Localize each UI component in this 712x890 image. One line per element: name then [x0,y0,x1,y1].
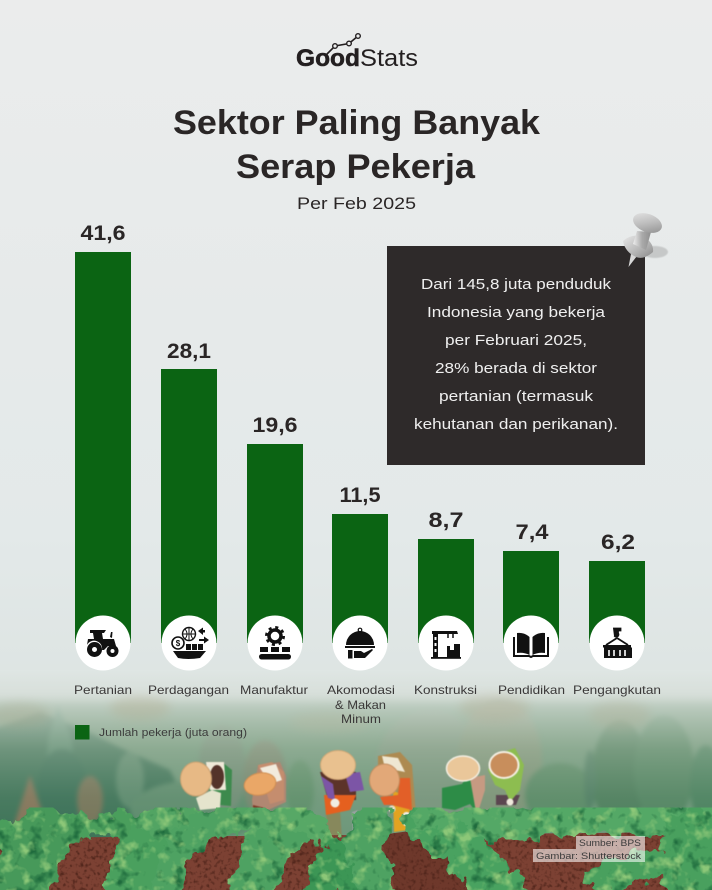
bar: Pendidikan: 7,4 [516,521,549,544]
callout: pertanian (termasuk [439,388,594,405]
logo: Stats [360,45,418,72]
title: Serap Pekerja [236,148,476,186]
logo [296,34,418,72]
farmer 2 [242,762,286,820]
bar: Pendidikan [503,521,559,643]
icon: trade ship [162,616,216,670]
source credits [533,836,645,862]
icon: shipping container [590,616,644,670]
subtitle: Per Feb 2025 [297,194,416,213]
category labels: Manufaktur [240,683,308,697]
logo: Good [296,45,360,72]
legend [75,725,247,740]
category labels: Pendidikan [498,683,565,697]
callout: Dari 145,8 juta penduduk [421,276,612,293]
bar: Konstruksi [418,509,474,643]
category labels: Perdagangan [148,683,229,697]
farmer 5 [442,756,485,812]
title [173,104,540,186]
source credits: Sumber: BPS [579,838,641,849]
category labels [74,683,661,726]
bar: Akomodasi [332,484,388,643]
bar: Pertanian [75,222,131,643]
bar: Akomodasi: 11,5 [340,484,381,507]
category labels: Pengangkutan [573,683,661,697]
bar: Pertanian: 41,6 [80,222,126,245]
bar: Perdagangan [161,340,217,643]
callout: per Februari 2025, [445,332,587,349]
callout: kehutanan dan perikanan). [414,416,618,433]
farmer 3 [320,750,364,840]
farmer 1 [180,762,232,810]
icon: food cloche [332,616,388,670]
icon: manufacturing [248,616,302,670]
category labels: Minum [341,712,381,726]
bar: Perdagangan: 28,1 [167,340,211,363]
callout: 28% berada di sektor [435,360,597,377]
category labels: Konstruksi [414,683,477,697]
farmer 6 [488,748,524,806]
icon: open book [504,616,558,670]
bar: Pengangkutan: 6,2 [601,531,635,554]
bar: Konstruksi: 8,7 [428,509,464,532]
bar: Manufaktur: 19,6 [252,414,298,437]
source credits: Gambar: Shutterstock [536,851,641,862]
bar: Manufaktur [247,414,303,643]
icon: construction crane [418,616,474,670]
bar chart [75,222,645,643]
farmer 4 [370,752,416,832]
bar: Pengangkutan [589,531,645,643]
icon: trade ship: $ [176,639,181,648]
callout: Indonesia yang bekerja [427,304,606,321]
callout [387,246,645,465]
category labels: & Makan [335,698,386,712]
icon: tractor [76,616,130,670]
icon: push pin [623,209,668,267]
title: Sektor Paling Banyak [173,104,540,142]
photo: soil [0,826,712,890]
category labels: Pertanian [74,683,132,697]
photo: farmers [180,748,524,840]
category labels: Akomodasi [327,683,395,697]
legend: Jumlah pekerja (juta orang) [99,727,247,739]
photo: potato plants [0,816,712,890]
photo: misty forest [0,670,712,850]
